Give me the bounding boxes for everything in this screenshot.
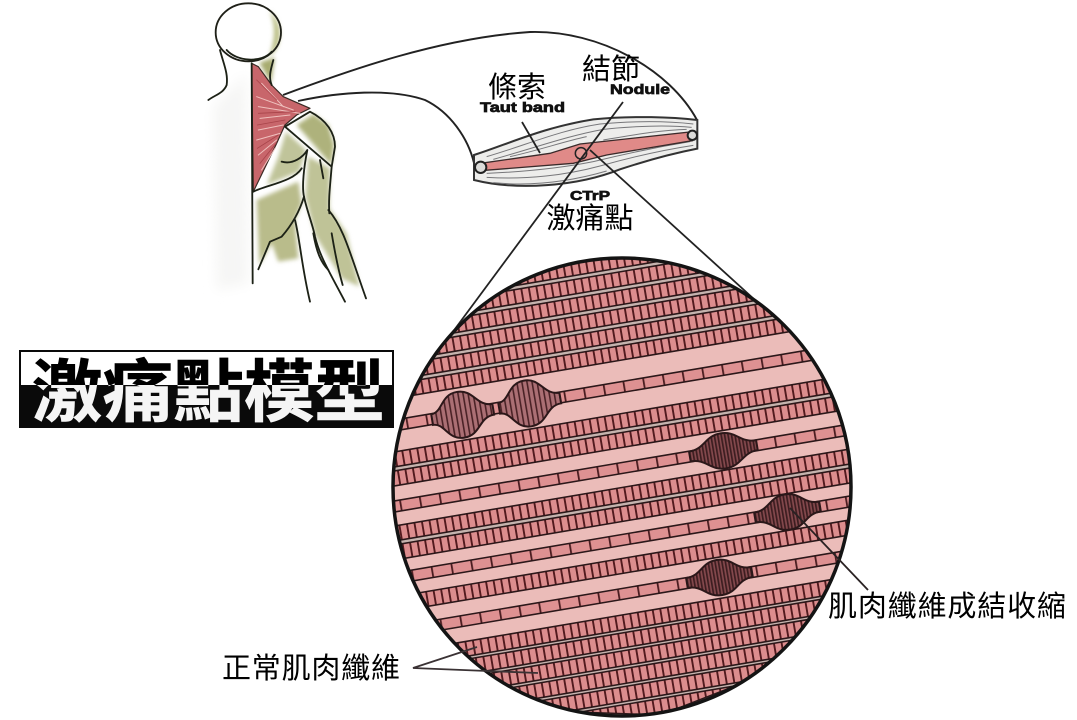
contracted thin fibres xyxy=(395,350,850,630)
knot 2 xyxy=(497,379,562,428)
head outline xyxy=(216,3,281,61)
knot 4 xyxy=(753,494,822,530)
magnified muscle fibres circle xyxy=(391,256,853,718)
label: normal fibres: 正常肌肉纖維 xyxy=(222,652,400,685)
label: nodule en: Nodule xyxy=(610,81,670,97)
zoom guide lines xyxy=(452,102,755,333)
label: CTrP: CTrP xyxy=(570,188,610,203)
knot 1 xyxy=(430,390,496,439)
label: taut band zh: 條索 xyxy=(488,71,546,104)
knot 5 xyxy=(685,558,754,596)
back anatomy figure xyxy=(208,3,366,302)
title: 激痛點模型 xyxy=(32,355,385,431)
label: contracted knot: 肌肉纖維成結收縮 xyxy=(828,590,1066,623)
packed background strips xyxy=(396,262,848,711)
callout curve from shoulder to muscle xyxy=(283,32,697,163)
right tendon xyxy=(688,131,697,140)
label: taut band en: Taut band xyxy=(480,99,565,115)
label: nodule zh: 結節 xyxy=(582,53,640,86)
nodule marker xyxy=(575,148,587,159)
taut band muscle detail xyxy=(474,117,697,186)
taut band xyxy=(481,132,692,171)
contraction knots xyxy=(430,379,822,596)
pointer: contracted knot xyxy=(790,508,868,590)
muscle belly xyxy=(474,117,697,186)
knot 3 xyxy=(688,432,759,470)
soft torso shading xyxy=(213,73,248,290)
body contour lines xyxy=(208,50,366,302)
striped normal fibres xyxy=(394,260,850,714)
trapezius muscle xyxy=(252,63,310,192)
label: trigger point: 激痛點 xyxy=(546,202,634,235)
left tendon xyxy=(475,162,486,173)
pointer: normal fibres xyxy=(413,647,538,673)
olive muscle shading xyxy=(257,11,359,287)
